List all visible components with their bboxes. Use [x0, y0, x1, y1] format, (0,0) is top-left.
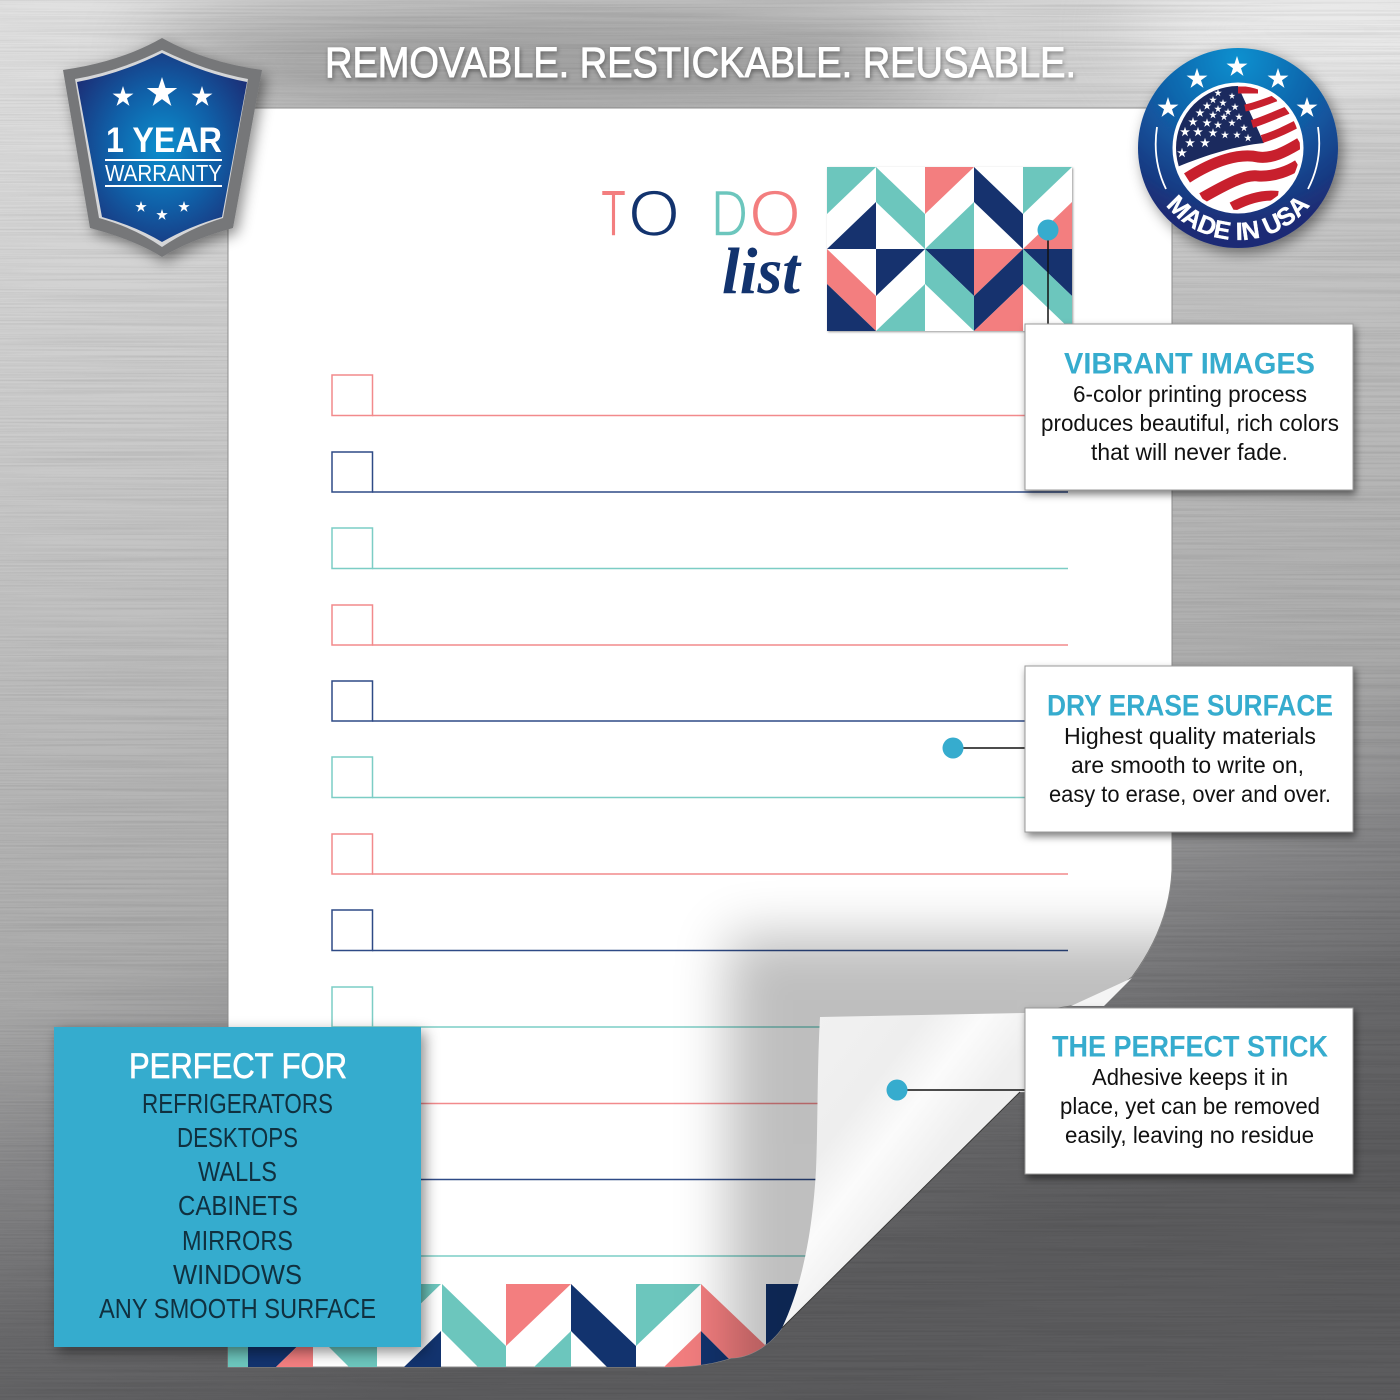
callout: the perfect stick: THE PERFECT STICK: [1052, 1030, 1328, 1064]
callout: vibrant images: VIBRANT IMAGES: [1064, 348, 1315, 380]
panel: perfect for: PERFECT FOR: [129, 1047, 347, 1086]
panel: whiteboard page: [228, 108, 1230, 1400]
bottom chevron pattern: [228, 1284, 831, 1367]
callout: vibrant images: [1025, 220, 1353, 490]
panel: perfect for: [54, 1027, 421, 1347]
badge: 1 year warranty shield: WARRANTY: [105, 160, 222, 186]
page curl shadow: [728, 935, 1230, 1400]
badge: 1 year warranty shield: 1 YEAR: [106, 121, 222, 160]
title: to do list: O: [628, 176, 680, 250]
title: to do list: O: [749, 176, 801, 250]
panel: perfect for: ANY SMOOTH SURFACE: [99, 1293, 376, 1324]
title: to do list: T: [601, 176, 626, 250]
callout: the perfect stick: [886, 1008, 1353, 1174]
callout: dry erase surface: DRY ERASE SURFACE: [1047, 690, 1333, 722]
headline: REMOVABLE. RESTICKABLE. REUSABLE.: [325, 39, 1076, 87]
callout: dry erase surface: are smooth to write on,: [1071, 752, 1304, 778]
callout: dry erase surface: [942, 666, 1353, 832]
callout: the perfect stick: easily, leaving no residue: [1065, 1122, 1314, 1148]
callout: vibrant images: produces beautiful, rich colors: [1041, 410, 1339, 436]
panel: perfect for: WINDOWS: [173, 1259, 302, 1290]
title: to do list: D: [711, 176, 748, 250]
chevron image tile: [827, 167, 1072, 331]
panel: perfect for: CABINETS: [178, 1190, 298, 1221]
panel: perfect for: WALLS: [198, 1156, 277, 1187]
to do checklist rows: [332, 375, 1068, 1256]
flag: [1170, 84, 1300, 207]
title: to do list: [601, 176, 802, 308]
callout: vibrant images: 6-color printing process: [1073, 381, 1307, 407]
badge: made in USA: MADE IN USA: [1166, 194, 1310, 240]
callout: vibrant images: that will never fade.: [1091, 439, 1288, 465]
marker dot and leader: [942, 738, 1025, 758]
panel: perfect for: REFRIGERATORS: [142, 1088, 333, 1119]
callout: dry erase surface: Highest quality materials: [1064, 723, 1316, 749]
badge: made in USA: [1132, 44, 1350, 262]
callout: the perfect stick: Adhesive keeps it in: [1092, 1064, 1288, 1090]
panel: perfect for: MIRRORS: [182, 1225, 293, 1256]
callout: the perfect stick: place, yet can be removed: [1060, 1093, 1320, 1119]
callout: dry erase surface: easy to erase, over and over.: [1049, 781, 1331, 807]
title: to do list: list: [722, 235, 802, 308]
badge: 1 year warranty shield: [63, 38, 262, 257]
marker dot and leader: [1038, 220, 1058, 324]
marker dot and leader: [886, 1080, 1025, 1100]
page curl: folded corner: [782, 978, 1132, 1328]
panel: perfect for: DESKTOPS: [177, 1122, 298, 1153]
